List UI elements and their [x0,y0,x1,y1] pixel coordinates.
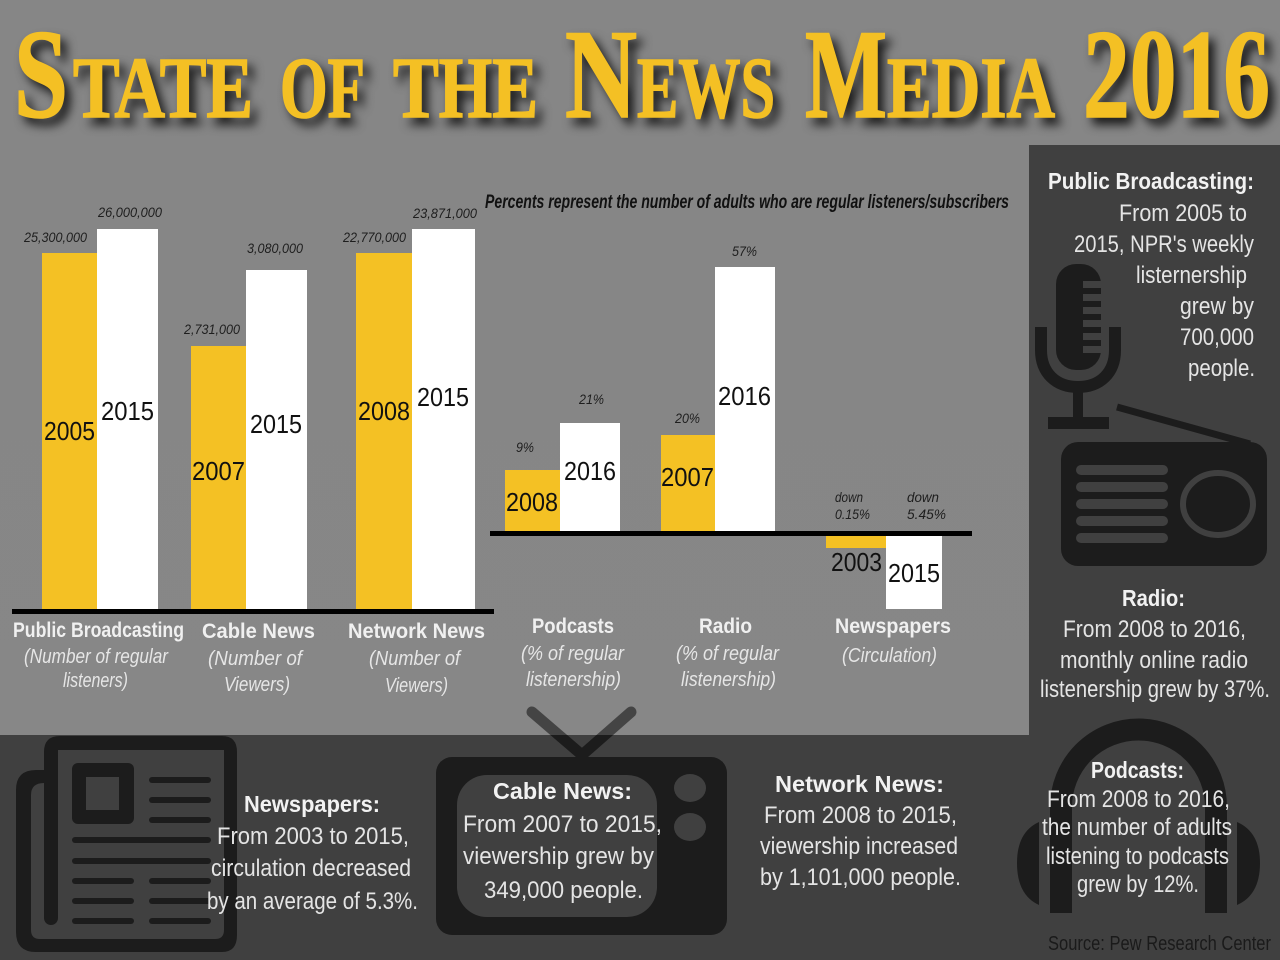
text: public broadcasting: From 2005 to [1119,200,1247,227]
text: radio [1040,585,1270,703]
text: podcasts [1042,757,1232,898]
bars: newspapers [826,489,946,609]
bars: network news [342,205,477,610]
label: network news: Viewers) [385,675,448,697]
title: THE [393,39,538,136]
bars: network news: 2015 [417,382,469,412]
text: podcasts: Podcasts: [1091,757,1184,783]
icon: headphones [1017,729,1260,913]
title: EDIA [887,39,1055,136]
title: EWS [637,39,775,136]
label: public broadcasting: listeners) [63,670,128,692]
label: podcasts: Podcasts [532,615,614,638]
label: newspapers [835,615,951,667]
text: network news: viewership increased [760,833,958,860]
label: radio: listenership) [681,669,776,691]
text: podcasts: the number of adults [1042,814,1232,841]
label: public broadcasting: Public Broadcasting [13,619,184,642]
text: public broadcasting: people. [1188,355,1255,382]
text: cable news [463,778,662,904]
bars: podcasts: 21% [578,391,604,407]
label: newspapers: (Circulation) [842,645,937,667]
text: cable news: viewership grew by [463,843,654,870]
bar chart: audience numbers [12,204,494,697]
text: public broadcasting: Public Broadcasting: [1048,168,1254,194]
text: network news: by 1,101,000 people. [760,864,961,891]
bars: cable news: 2007 [192,456,245,486]
bars: network news: 2008 [358,396,410,426]
panel: right dark column [1029,145,1280,745]
label: network news: (Number of [369,648,462,670]
bars: cable news [183,240,307,610]
text: newspapers: From 2003 to 2015, [217,823,409,850]
bars: radio: 20% [674,410,700,426]
bars: cable news: 3,080,000 [247,240,303,256]
text: podcasts: grew by 12%. [1077,871,1199,898]
bars: podcasts: 2008 [506,487,558,517]
label: network news [348,620,485,697]
bars: network news: 23,871,000 [412,205,477,221]
bars: radio [661,243,775,532]
title: TATE [73,39,253,136]
bars: public broadcasting [23,204,162,610]
label: newspapers: Newspapers [835,615,951,638]
label: podcasts: (% of regular [521,643,625,665]
bars: network news: 22,770,000 [342,229,406,245]
title: S [14,5,68,145]
bars: public broadcasting: 26,000,000 [97,204,162,220]
text: public broadcasting [1048,168,1255,382]
text: network news: Network News: [775,771,944,797]
note: percent explanation: Percents represent the number of adults who are regular listeners/subscribers [485,192,1009,213]
text: podcasts: From 2008 to 2016, [1047,786,1230,813]
text: radio: From 2008 to 2016, [1063,616,1246,643]
text: newspapers: circulation decreased [211,855,411,882]
bars: podcasts: 9% [516,439,534,455]
bars: cable news: 2,731,000 [183,321,240,337]
label: cable news: Cable News [202,620,315,643]
text: network news [760,771,961,891]
text: podcasts: listening to podcasts [1046,843,1229,870]
bars: cable news: 2015 [250,409,302,439]
bar chart: percent listenership and circulation [490,243,972,691]
icon: television [436,712,727,935]
bars: newspapers: down [907,489,939,505]
title: M [805,5,887,145]
panel: bottom dark band [0,735,1280,960]
label: radio: (% of regular [676,643,780,665]
label: network news: Network News [348,620,485,643]
bars: public broadcasting: 2015 [101,396,154,426]
bars: podcasts: 2016 [564,456,616,486]
bars: radio: 2016 [718,381,771,411]
label: radio: Radio [699,615,752,638]
text: newspapers: by an average of 5.3%. [207,888,418,915]
bars: radio: 57% [732,243,757,259]
bars: public broadcasting: 2005 [44,416,95,446]
text: radio: monthly online radio [1060,647,1248,674]
icon: microphone [1041,264,1115,429]
label: podcasts [521,615,625,691]
text: cable news: Cable News: [493,778,632,804]
label: radio [676,615,780,691]
text: public broadcasting: listernership [1136,262,1247,289]
bars: podcasts [505,391,620,532]
text: newspapers [207,791,418,915]
bars: newspapers: 0.15% [835,506,870,522]
icon: radio [1061,407,1267,566]
label: public broadcasting [13,619,184,692]
bars: radio: 2007 [661,462,714,492]
label: cable news [202,620,315,696]
bars: newspapers: down [835,489,863,505]
title [14,5,1270,145]
text: network news: From 2008 to 2015, [764,802,957,829]
title: OF [280,39,365,136]
text: newspapers: Newspapers: [244,791,380,817]
text: cable news: From 2007 to 2015, [463,811,662,838]
bars: newspapers: 2003 [831,547,882,577]
label: podcasts: listenership) [526,669,621,691]
label: public broadcasting: (Number of regular [24,646,169,668]
text: radio: Radio: [1122,585,1185,611]
text: cable news: 349,000 people. [484,877,643,904]
title: N [565,5,637,145]
bars: public broadcasting: 25,300,000 [23,229,87,245]
text: public broadcasting: 700,000 [1180,324,1254,351]
text: public broadcasting: grew by [1180,293,1254,320]
label: cable news: Viewers) [224,674,290,696]
label: cable news: (Number of [208,648,304,670]
icon: newspaper [16,736,237,952]
bars: newspapers: 5.45% [907,506,946,522]
bars: newspapers: 2015 [888,558,940,588]
